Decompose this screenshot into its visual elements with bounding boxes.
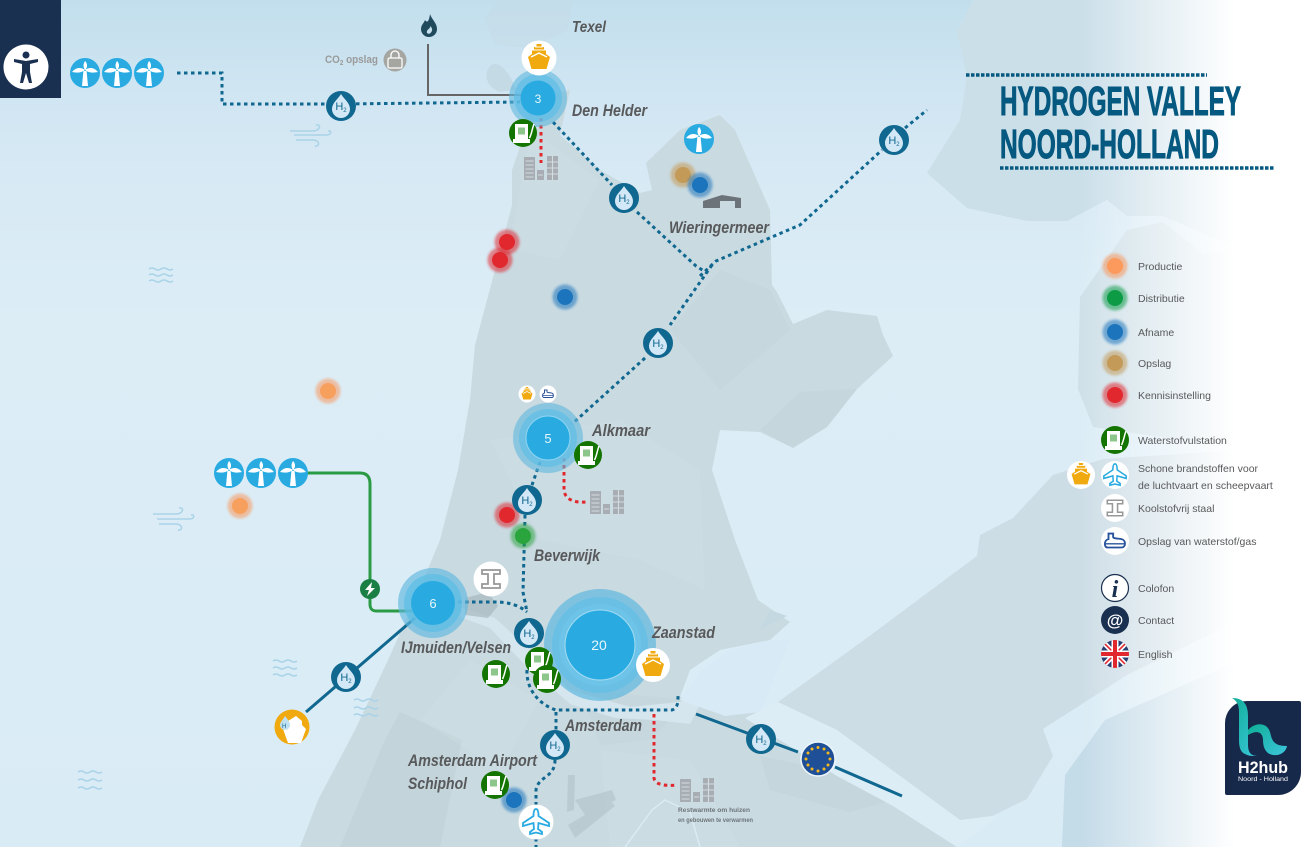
node: H2: H	[549, 740, 557, 752]
icon: wind	[290, 125, 331, 146]
node: H2: H	[755, 734, 763, 746]
land: Noorderhaaks	[487, 64, 516, 92]
icon badge: plane	[518, 804, 554, 840]
hub: Den Helder: 3	[535, 92, 542, 106]
node: H2	[326, 91, 356, 121]
icon badge: storage Alkmaar	[540, 386, 556, 402]
buildings and warehouse	[524, 156, 741, 802]
icon: waves	[149, 268, 173, 282]
node: H2: H	[521, 495, 529, 507]
pipeline: Den Helder to Wieringermeer junction	[553, 122, 707, 273]
legend: Kennisinstelling: Kennisinstelling	[1138, 390, 1211, 402]
hydrogen nodes	[326, 91, 909, 760]
pipeline: IJmuiden	[458, 602, 527, 612]
node: H2: H	[523, 628, 531, 640]
land: IJmuiden harbour	[465, 592, 498, 618]
icon badge: ship Zaanstad	[636, 648, 670, 682]
marker: productie	[228, 494, 252, 518]
land: Noord-Holland	[300, 90, 957, 847]
legend: Opslag van waterstof/gas	[1101, 527, 1256, 555]
wind turbines: IJmuiden group	[214, 458, 308, 488]
node: H2: 2	[660, 345, 664, 351]
node: H2: 2	[343, 108, 347, 114]
icon: lock	[384, 48, 406, 72]
node: H2	[643, 328, 673, 358]
label: CO2 opslag: opslag	[343, 54, 378, 66]
wind turbine: Wieringermeer	[684, 124, 714, 154]
land: Texel	[485, 0, 572, 48]
node: H2	[512, 485, 542, 515]
legend: Opslag	[1102, 350, 1171, 376]
icon badge: ship Den Helder	[522, 40, 556, 76]
label: Zaanstad: Zaanstad	[651, 623, 716, 642]
icon: flame	[421, 14, 437, 37]
legend: English: English	[1138, 649, 1173, 661]
legend: Afname	[1102, 320, 1174, 344]
land: Gelderland corner	[1062, 660, 1240, 847]
legend: English	[1101, 640, 1173, 668]
marker: afname	[502, 788, 526, 812]
marker: kennis	[494, 502, 520, 528]
pipeline: junction to Alkmaar	[572, 265, 712, 424]
label: Wieringermeer: Wieringermeer	[669, 218, 770, 237]
electric cable	[307, 473, 412, 611]
icon: waves	[78, 771, 102, 789]
label: Schiphol: Schiphol	[408, 774, 468, 793]
hub: IJmuiden	[398, 568, 468, 638]
hub: Den Helder	[509, 69, 567, 127]
gas line to CO2 storage	[428, 44, 522, 95]
marker: kennis	[488, 248, 512, 272]
logo: H2hub	[1225, 698, 1301, 795]
legend: Waterstofvulstation	[1101, 426, 1227, 454]
legend: Distributie: Distributie	[1138, 293, 1185, 305]
label: CO2 opslag: 2	[340, 60, 343, 67]
heat line: Den Helder	[540, 118, 542, 163]
heat line: Amsterdam	[654, 714, 677, 785]
pipelines	[177, 44, 927, 847]
marker: afname	[552, 284, 578, 310]
hub: IJmuiden: 6	[429, 596, 437, 611]
legend: Afname: Afname	[1138, 327, 1174, 339]
icon: waves	[273, 660, 297, 676]
water: IJmeer	[680, 640, 790, 716]
label: Beverwijk: Beverwijk	[534, 546, 601, 565]
legend	[1067, 254, 1273, 668]
marker: distributie	[510, 524, 536, 548]
dots: stakeholder markers	[228, 162, 712, 812]
land: municipal shading	[340, 712, 462, 847]
icon: waves	[354, 699, 378, 716]
node: H2: 2	[531, 635, 535, 641]
node: H2	[540, 730, 570, 760]
legend: Productie: Productie	[1138, 261, 1183, 273]
node: H2	[609, 183, 639, 213]
pipeline: Alkmaar to Beverwijk	[523, 462, 540, 612]
land: Schiphol runways	[567, 775, 616, 838]
legend: Schone brandstoffen: Schone brandstoffen voor	[1138, 463, 1259, 475]
legend: Schone brandstoffen	[1067, 461, 1273, 492]
CO2 storage	[325, 48, 406, 72]
node: H2	[746, 724, 776, 754]
legend: Contact: Contact	[1138, 615, 1174, 627]
legend: Waterstofvulstation: Waterstofvulstation	[1138, 435, 1227, 447]
legend: Productie	[1102, 254, 1183, 278]
legend: Kennisinstelling	[1102, 382, 1211, 408]
icon: buildings Den Helder	[524, 156, 558, 180]
node: H2: 2	[557, 747, 561, 753]
node: H2: 2	[896, 142, 900, 148]
marker: opslag	[670, 162, 696, 188]
hub: Zaanstad: 20	[591, 637, 607, 653]
pipeline: to Schiphol	[536, 712, 556, 847]
legend: Colofon: Colofon	[1138, 583, 1174, 595]
label: Alkmaar: Alkmaar	[591, 421, 651, 440]
hub: Alkmaar: 5	[544, 431, 552, 446]
icon: warehouse	[703, 195, 741, 208]
fuel stations	[481, 119, 602, 799]
icon: buildings Amsterdam	[680, 778, 714, 802]
legend: Colofon: i	[1112, 577, 1119, 603]
marker: kennis	[494, 230, 520, 254]
logo: H2hub: H2hub	[1238, 758, 1288, 777]
legend: Colofon	[1102, 574, 1174, 603]
title rule bottom	[1000, 166, 1275, 170]
title	[966, 75, 1275, 168]
caption: restwarmte: en gebouwen te verwarmen	[678, 817, 753, 824]
pipeline: junction to east	[700, 110, 927, 276]
pipeline: offshore wind to Den Helder	[177, 73, 520, 104]
icon: electricity bolt	[360, 579, 380, 599]
icon badge: ship Alkmaar	[518, 386, 536, 402]
icon: wind	[153, 508, 194, 530]
node: H2	[879, 125, 909, 155]
legend: Koolstofvrij staal	[1101, 494, 1214, 522]
node: H2	[331, 662, 361, 692]
title rule top	[966, 73, 1207, 77]
label: CO2 opslag: CO	[325, 54, 342, 66]
node: H2: H	[335, 101, 343, 113]
legend: Contact	[1101, 606, 1174, 634]
logo: H2hub: Noord - Holland	[1238, 777, 1288, 783]
legend: Contact: @	[1107, 611, 1123, 630]
icon badge: hydrogen ship	[274, 710, 310, 744]
legend: Opslag van waterstof/gas: Opslag van waterstof/gas	[1138, 536, 1256, 548]
legend: Koolstofvrij staal: Koolstofvrij staal	[1138, 503, 1214, 515]
icon badge: EU flag	[801, 742, 835, 776]
node: H2: 2	[348, 679, 352, 685]
icon badge: hydrogen ship: H	[282, 724, 286, 730]
node: H2: 2	[626, 200, 630, 206]
node: H2: 2	[763, 741, 767, 747]
water: Gooimeer channel	[745, 702, 1000, 847]
land: Flevoland	[778, 450, 1240, 832]
heat line: Alkmaar	[564, 458, 587, 502]
legend: Distributie	[1102, 286, 1185, 310]
land: Friesland	[927, 0, 1311, 280]
pipeline: ship line	[306, 618, 415, 712]
land: islet	[760, 610, 787, 629]
map: land masses	[300, 0, 1311, 847]
pipeline: Amsterdam ring	[527, 670, 678, 710]
hub: Alkmaar	[513, 403, 583, 473]
water: Noordzeekanaal and IJ	[460, 608, 745, 724]
legend: Opslag: Opslag	[1138, 358, 1171, 370]
node: H2: H	[340, 672, 348, 684]
wind turbines: north group	[70, 58, 164, 88]
water: Amstel rivers	[625, 800, 700, 847]
node: H2: H	[618, 193, 626, 205]
icon: buildings Alkmaar	[590, 490, 624, 514]
hub: Zaanstad	[544, 589, 656, 701]
node: H2: H	[652, 338, 660, 350]
node: H2	[514, 618, 544, 648]
node: H2: 2	[529, 502, 533, 508]
label: Amsterdam Airport: Amsterdam Airport	[407, 751, 538, 770]
pipeline: Europe line	[696, 714, 902, 796]
icon badge: steel	[474, 562, 508, 596]
accessibility button	[0, 0, 61, 98]
label: IJmuiden/Velsen: IJmuiden/Velsen	[401, 638, 511, 657]
label: Amsterdam: Amsterdam	[564, 716, 642, 735]
icon group: faint waves and wind	[78, 125, 378, 789]
marker: productie	[316, 378, 340, 404]
label: Den Helder: Den Helder	[572, 101, 648, 120]
white fade at right	[1080, 0, 1235, 847]
marker: afname	[688, 172, 712, 198]
place labels	[401, 19, 770, 793]
land: Noordoostpolder	[1078, 222, 1311, 450]
label: Texel: Texel	[572, 19, 606, 36]
legend: Schone brandstoffen: de luchtvaart en scheepvaart	[1138, 480, 1273, 492]
node: H2: H	[888, 135, 896, 147]
caption: restwarmte: Restwarmte om huizen	[678, 807, 750, 814]
